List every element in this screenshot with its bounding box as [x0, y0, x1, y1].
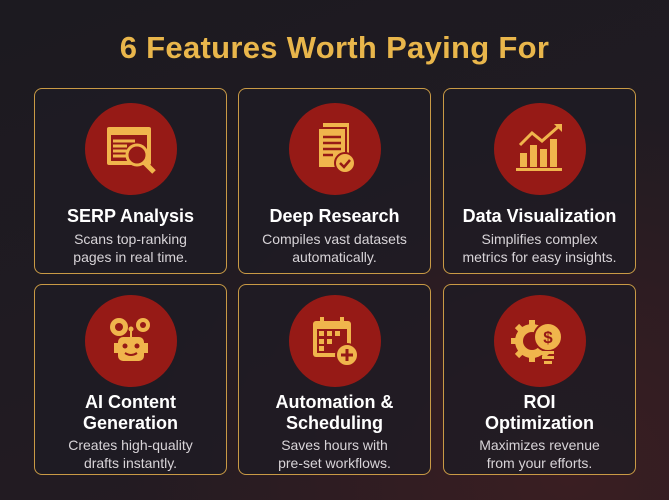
- panel: ROI Optimization: [443, 284, 636, 475]
- text: Scans top-ranking: [74, 231, 187, 247]
- heading: Scheduling: [286, 413, 383, 433]
- text: metrics for easy insights.: [462, 249, 617, 265]
- heading: Data Visualization: [463, 206, 616, 226]
- icon: gear bulb dollar: [494, 295, 586, 387]
- text: [462, 231, 617, 265]
- text: [68, 437, 193, 471]
- text: drafts instantly.: [84, 455, 177, 471]
- icon: browser magnifier: [84, 103, 176, 195]
- text: pages in real time.: [73, 249, 188, 265]
- text: [479, 437, 600, 471]
- heading: SERP Analysis: [67, 206, 194, 226]
- heading: [276, 392, 393, 433]
- icon: calendar plus: [288, 295, 380, 387]
- text: [262, 231, 407, 265]
- text: Creates high-quality: [68, 437, 193, 453]
- heading: Optimization: [485, 413, 594, 433]
- text: Compiles vast datasets: [262, 231, 407, 247]
- text: [278, 437, 391, 471]
- panel: Data Visualization: [443, 88, 636, 274]
- heading: [485, 392, 594, 433]
- icon: gear bulb dollar: $: [543, 328, 553, 347]
- heading: AI Content: [85, 392, 176, 412]
- heading: Automation &: [276, 392, 393, 412]
- text: pre-set workflows.: [278, 455, 391, 471]
- heading: Generation: [83, 413, 178, 433]
- title: 6 Features Worth Paying For: [120, 30, 549, 65]
- text: from your efforts.: [487, 455, 592, 471]
- text: [73, 231, 188, 265]
- icon: documents check: [288, 103, 380, 195]
- icon: robot gears: [84, 295, 176, 387]
- text: automatically.: [292, 249, 377, 265]
- heading: ROI: [523, 392, 556, 412]
- text: Saves hours with: [281, 437, 388, 453]
- text: Maximizes revenue: [479, 437, 600, 453]
- text: Simplifies complex: [482, 231, 597, 247]
- icon: bar chart: [494, 103, 586, 195]
- panel: Automation & Scheduling: [238, 284, 431, 475]
- panel: AI Content Generation: [34, 284, 227, 475]
- panel: SERP Analysis: [34, 88, 227, 274]
- heading: [83, 392, 178, 433]
- heading: Deep Research: [269, 206, 400, 226]
- panel: Deep Research: [238, 88, 431, 274]
